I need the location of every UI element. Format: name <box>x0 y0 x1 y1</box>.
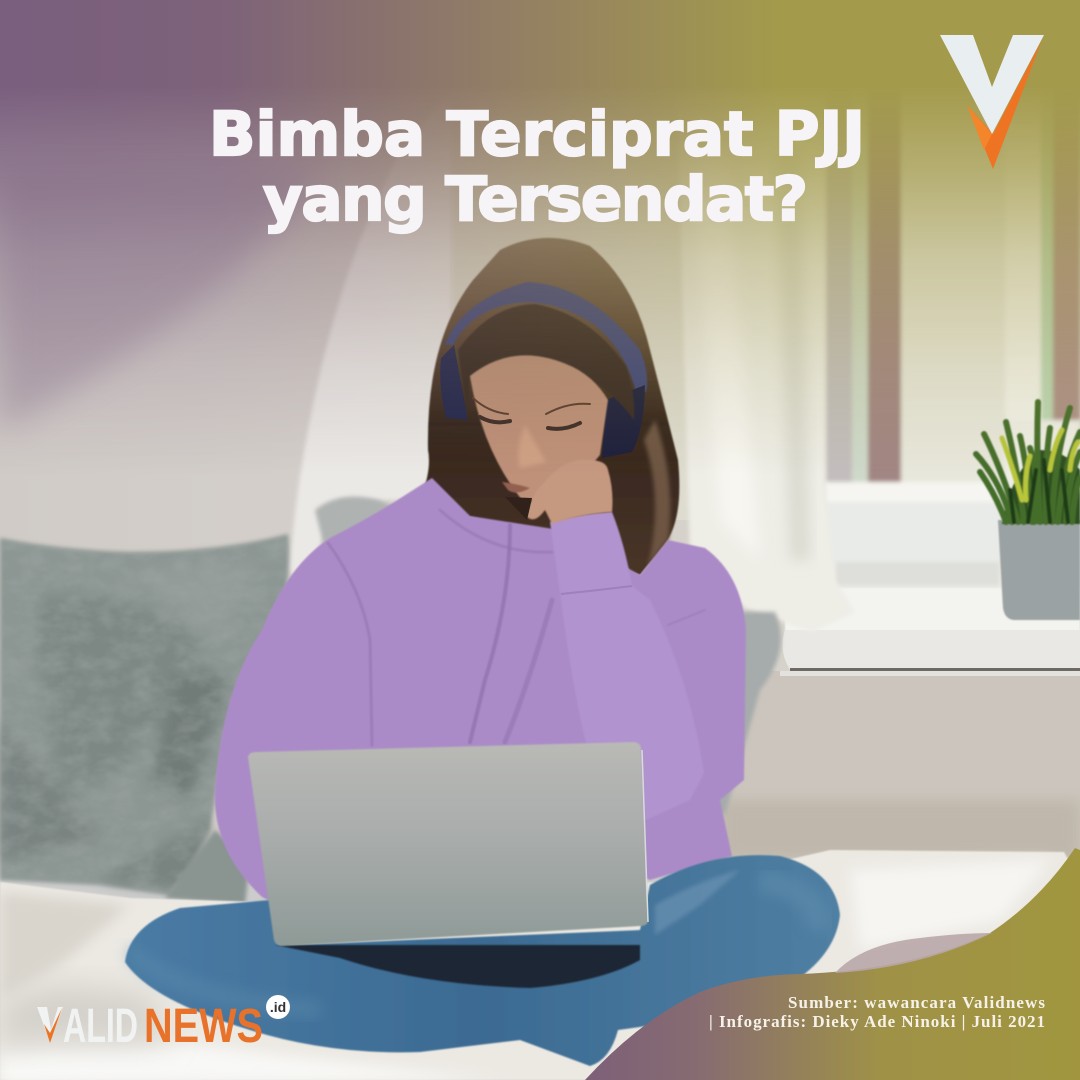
sleeve shading <box>561 586 632 594</box>
right ear cup <box>602 385 645 458</box>
hair <box>420 238 679 575</box>
hand <box>527 460 612 524</box>
sheet behind small logo <box>0 985 165 1050</box>
window sill <box>720 588 1080 861</box>
pot <box>998 520 1080 620</box>
Validnews wordmark: .id <box>270 999 286 1015</box>
leaves <box>976 402 1080 524</box>
cushion behind <box>315 497 425 570</box>
bottom swoosh panel <box>585 848 1080 1080</box>
face <box>470 355 608 500</box>
hoodie shading <box>328 510 705 745</box>
mouth <box>502 482 530 493</box>
Validnews wordmark: NEWS <box>144 1000 263 1053</box>
bed sheet <box>0 850 1080 1080</box>
hoodie body <box>215 478 746 900</box>
Validnews wordmark: ALID <box>63 1000 138 1053</box>
laptop <box>248 742 648 946</box>
hair light strands <box>644 420 670 566</box>
curtain left <box>290 90 452 590</box>
window <box>824 0 1080 590</box>
logo: V mark <box>940 35 1044 169</box>
title: yang Tersendat? <box>263 164 808 235</box>
grey fur pillow <box>0 534 289 895</box>
source credit: | Infografis: Dieky Ade Ninoki | Juli 2021 <box>709 1012 1045 1031</box>
headphones band <box>445 282 647 392</box>
wall behind head <box>452 0 692 520</box>
left ear cup <box>440 345 468 420</box>
source credit: Sumber: wawancara Validnews <box>788 993 1045 1012</box>
title: Bimba Terciprat PJJ <box>209 99 865 170</box>
fringe hair <box>458 304 634 420</box>
potted plant <box>976 402 1080 620</box>
raised sleeve <box>550 512 704 820</box>
eyes and brows <box>473 398 590 429</box>
neck shadow <box>505 497 532 520</box>
woman studying <box>215 238 746 900</box>
source credit <box>709 993 1045 1031</box>
Validnews wordmark <box>37 995 290 1053</box>
jeans <box>125 855 840 1066</box>
title <box>209 99 865 235</box>
curtain right <box>676 60 855 632</box>
top gradient overlay <box>0 0 1080 446</box>
